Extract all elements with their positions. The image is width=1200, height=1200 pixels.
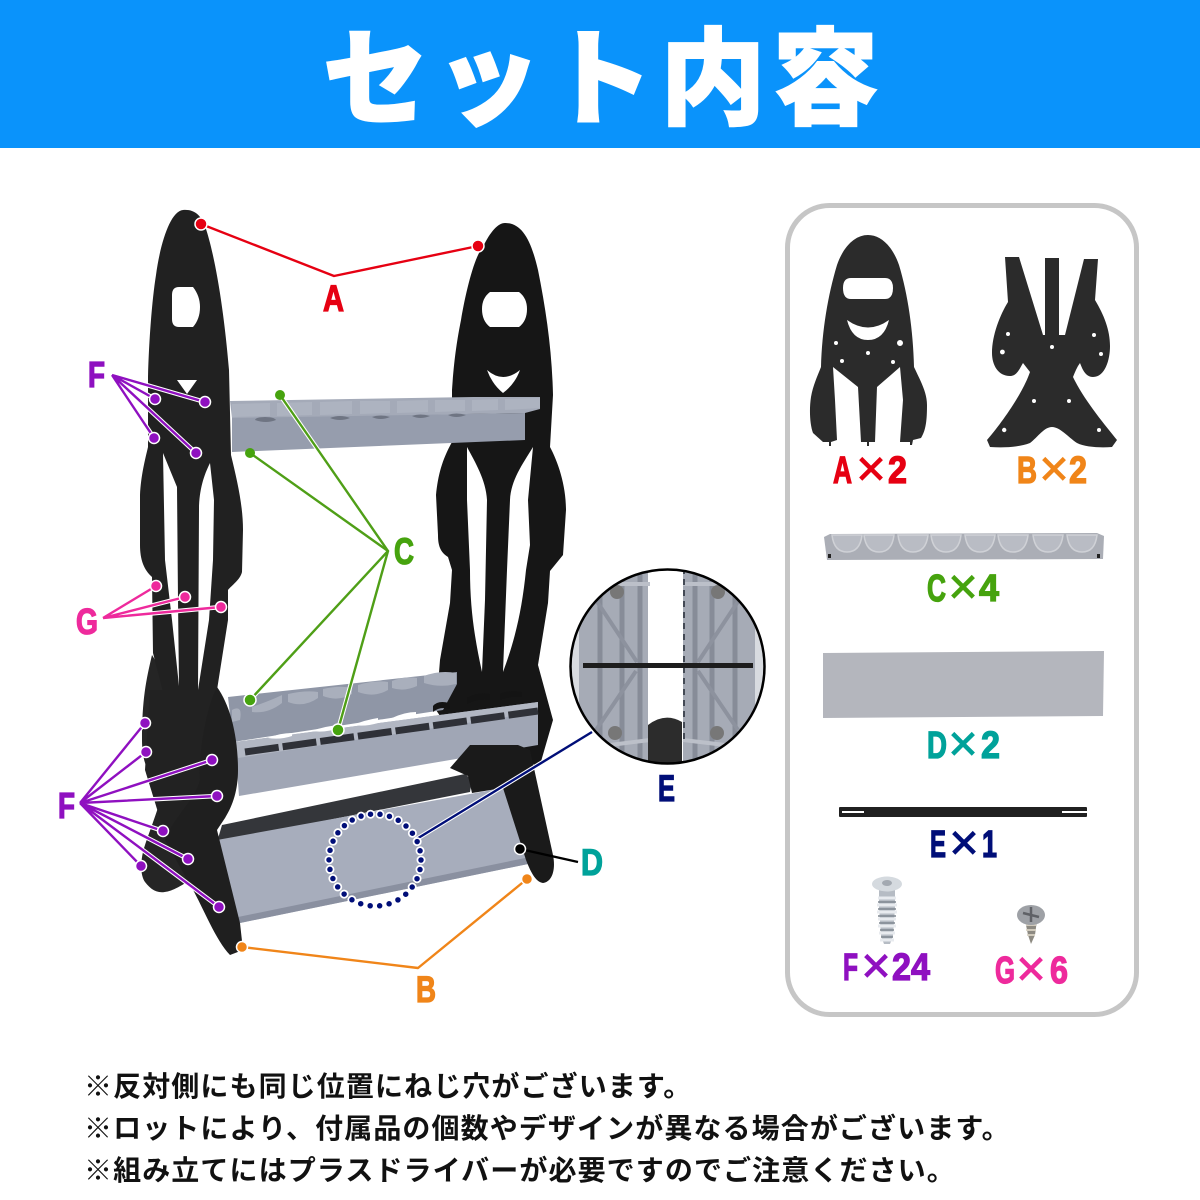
upper shelf: [230, 397, 540, 452]
label F×24: [843, 940, 930, 989]
label E×1: E: [930, 824, 946, 866]
label F×24: ×: [859, 940, 893, 989]
part C icon: [824, 533, 1104, 560]
label G×6: [995, 943, 1068, 992]
label F lower: F: [58, 785, 75, 826]
label B×2: ×: [1037, 443, 1071, 492]
note line 1: ※反対側にも同じ位置にねじ穴がございます。: [84, 1070, 692, 1102]
crossbar: [217, 774, 472, 842]
lower front shelf: [235, 691, 538, 796]
label A×2: ×: [854, 443, 888, 492]
label C: C: [394, 531, 414, 572]
detail circle: connector bar E: [570, 568, 765, 765]
label D×2: D: [927, 725, 947, 767]
label A×2: [833, 443, 907, 492]
label D×2: [927, 718, 1000, 767]
leader lines F lower: [80, 718, 224, 912]
label G×6: G: [995, 950, 1015, 992]
label C×4: ×: [946, 561, 980, 610]
label E: E: [658, 768, 675, 809]
label D×2: ×: [946, 718, 980, 767]
leader lines G: [103, 580, 226, 618]
dotted circle with leader E: [329, 732, 592, 906]
label E×1: [930, 817, 997, 866]
part B icon: [987, 257, 1117, 447]
label B: B: [416, 969, 436, 1010]
label G×6: 6: [1050, 950, 1068, 992]
rod stand photo: [140, 210, 566, 955]
part F screw icon: [872, 876, 902, 944]
label C×4: [927, 561, 999, 610]
label F×24: 24: [892, 947, 930, 989]
bottom board: [217, 788, 533, 923]
label F upper: F: [88, 354, 105, 395]
part E icon: [839, 807, 1087, 817]
left upright panel: [140, 210, 243, 745]
label A×2: A: [833, 450, 852, 492]
part G screw icon: [1017, 905, 1045, 944]
label B×2: [1017, 443, 1087, 492]
notes: [84, 1070, 1011, 1186]
note line 2: ※ロットにより、付属品の個数やデザインが異なる場合がございます。: [84, 1112, 1011, 1144]
title: セット内容: [323, 22, 878, 139]
label C×4: C: [927, 568, 946, 610]
label B×2: 2: [1069, 450, 1087, 492]
parts panel: [788, 206, 1136, 1014]
note line 3: ※組み立てにはプラスドライバーが必要ですのでご注意ください。: [84, 1154, 956, 1186]
leader line D: [514, 844, 578, 862]
leader lines B: [236, 874, 532, 968]
label A: A: [323, 278, 344, 319]
label C×4: 4: [979, 568, 999, 610]
part D icon: [823, 651, 1104, 718]
front left foot panel: [165, 687, 243, 955]
label D×2: 2: [981, 725, 1000, 767]
leader lines C: [244, 390, 388, 736]
label E×1: 1: [982, 824, 997, 866]
label A×2: 2: [888, 450, 907, 492]
header banner: [0, 0, 1200, 148]
left rear foot panel: [141, 655, 215, 892]
label B×2: B: [1017, 450, 1037, 492]
label G: G: [76, 601, 98, 642]
label G×6: ×: [1014, 943, 1048, 992]
part A icon: [810, 235, 927, 446]
label F×24: F: [843, 947, 858, 989]
front right foot panel: [450, 745, 554, 883]
left lower joint mass: [145, 690, 238, 835]
leader lines A: [195, 218, 484, 276]
rear lower shelf: [228, 672, 457, 742]
right upright panel: [436, 223, 566, 765]
label D: D: [581, 842, 603, 883]
label E×1: ×: [947, 817, 981, 866]
leader lines F upper: [112, 375, 210, 458]
